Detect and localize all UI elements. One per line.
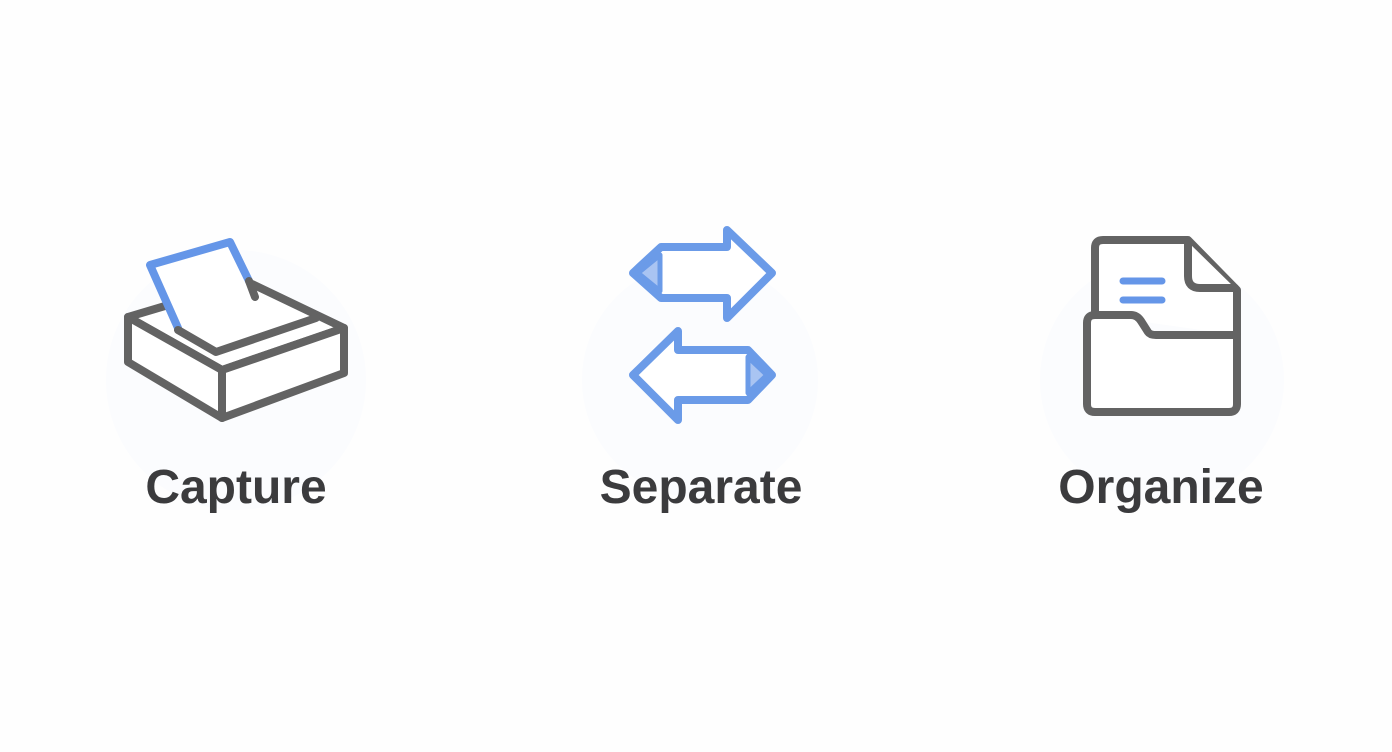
panel: capture <box>106 242 366 514</box>
icon: folder with document <box>1087 240 1237 412</box>
icon: scanner tray with paper <box>128 242 344 418</box>
icon: right arrow <box>633 230 772 318</box>
panel: separate <box>582 230 818 514</box>
label: Separate: Separate <box>600 461 802 514</box>
icon: left arrow <box>633 331 772 420</box>
label: Capture: Capture <box>145 461 327 514</box>
label: Organize: Organize <box>1058 461 1264 514</box>
panel: organize <box>1040 240 1284 514</box>
